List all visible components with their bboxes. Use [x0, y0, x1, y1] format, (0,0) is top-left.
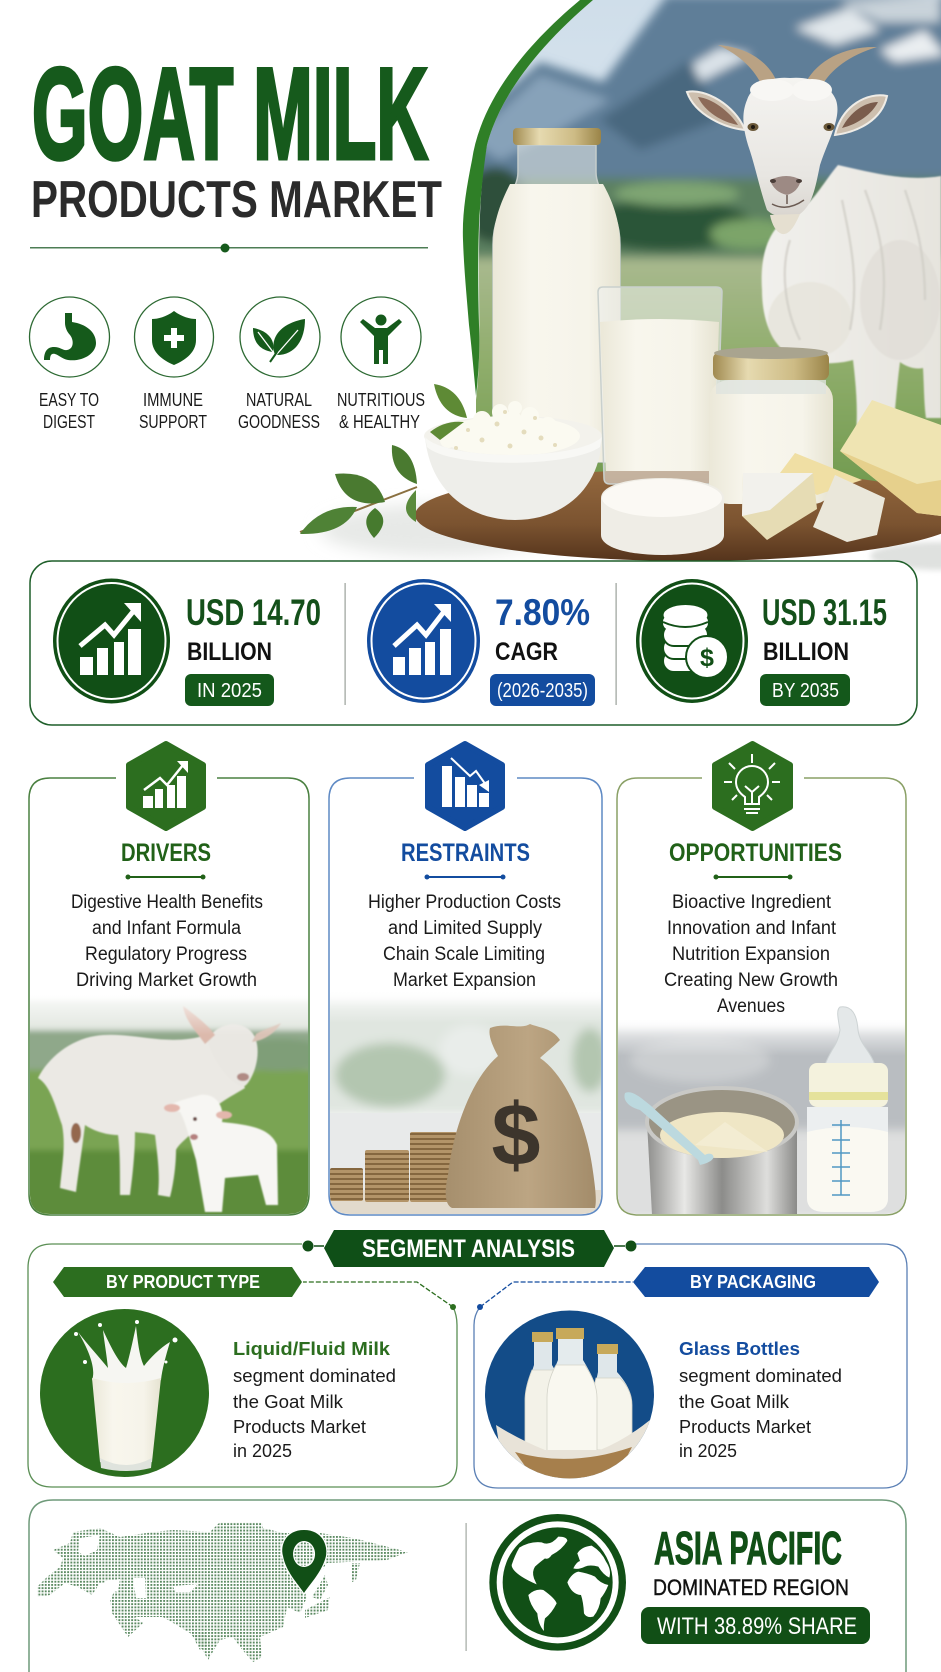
- text: glass bottles: [679, 1338, 842, 1461]
- tag: by packaging: [633, 1267, 879, 1297]
- icon: growth chart blue: [367, 579, 480, 703]
- label: natural goodness: GOODNESS: [238, 411, 320, 432]
- text: liquid fluid milk: Liquid/Fluid Milk: [233, 1338, 391, 1359]
- label: nutritious and healthy: & HEALTHY: [339, 411, 420, 432]
- text: liquid fluid milk: Products Market: [233, 1416, 366, 1437]
- stat: USD 14.70 billion in 2025: BILLION: [187, 638, 272, 666]
- restraints photo: money bag and coins: $: [492, 1085, 540, 1184]
- icon: immune support: [134, 297, 214, 377]
- heading rule: [424, 874, 506, 880]
- text: opportunities: [664, 892, 838, 1017]
- label: natural goodness: NATURAL: [246, 389, 312, 410]
- image: milk bottles in basket: [485, 1310, 654, 1480]
- text: restraints: Chain Scale Limiting: [383, 944, 545, 965]
- icon: coins: [636, 579, 748, 703]
- text: drivers: Regulatory Progress: [85, 944, 247, 965]
- text: opportunities: Avenues: [717, 996, 785, 1017]
- stat: USD 31.15 billion by 2035: USD 31.15: [762, 592, 887, 633]
- text: liquid fluid milk: [233, 1338, 396, 1461]
- pill: with 38.89% share: [641, 1607, 870, 1644]
- label: natural goodness: [238, 389, 320, 432]
- icon: globe: [489, 1514, 626, 1651]
- benefit icons row: [30, 297, 425, 432]
- image fade: [29, 985, 310, 1035]
- heading: drivers: DRIVERS: [121, 839, 211, 867]
- segment outline right: [474, 1244, 907, 1488]
- opportunities photo background: [605, 1028, 915, 1220]
- title divider: [30, 244, 428, 252]
- stat: USD 31.15 billion by 2035: BILLION: [763, 638, 849, 666]
- heading: restraints: RESTRAINTS: [401, 839, 530, 867]
- tag: by packaging: BY PACKAGING: [690, 1272, 816, 1292]
- photo background: mountains and meadow: [476, 0, 941, 482]
- tag: by product type: BY PRODUCT TYPE: [106, 1272, 260, 1292]
- stat: USD 14.70 billion in 2025: IN 2025: [197, 680, 262, 702]
- glass of milk: [598, 287, 722, 484]
- text: drivers: Digestive Health Benefits: [71, 892, 263, 913]
- heading banner: segment analysis: SEGMENT ANALYSIS: [362, 1235, 575, 1263]
- text: opportunities: Innovation and Infant: [667, 918, 837, 939]
- text: glass bottles: Glass Bottles: [679, 1338, 800, 1359]
- map: dotted Eurasia: [37, 1522, 408, 1662]
- stat: 7.80% CAGR 2026-2035: (2026-2035): [497, 680, 588, 702]
- bowl of curds: [424, 401, 602, 520]
- restraints photo: money bag and coins: [320, 1000, 610, 1215]
- wooden board: [415, 469, 941, 561]
- heading: opportunities: OPPORTUNITIES: [669, 839, 842, 867]
- stat: USD 31.15 billion by 2035: BY 2035: [772, 680, 839, 702]
- panel: regional dominance: [29, 1500, 906, 1672]
- green leaves: [300, 384, 467, 538]
- text: glass bottles: in 2025: [679, 1440, 737, 1461]
- label: nutritious and healthy: NUTRITIOUS: [337, 389, 425, 410]
- label: nutritious and healthy: [337, 389, 425, 432]
- text: glass bottles: the Goat Milk: [679, 1391, 790, 1412]
- stat: USD 31.15 billion by 2035: [760, 592, 887, 706]
- icon: natural goodness: [240, 297, 320, 377]
- stat: USD 14.70 billion in 2025: [185, 592, 321, 706]
- image fade: [617, 1016, 907, 1056]
- image: milk glass splash: [40, 1309, 209, 1477]
- opportunities photo: infant formula and bottle: [624, 1007, 888, 1215]
- label: easy to digest: [39, 389, 99, 432]
- panel: opportunities: [605, 744, 915, 1220]
- text: glass bottles: segment dominated: [679, 1365, 842, 1386]
- text: restraints: and Limited Supply: [388, 918, 542, 939]
- image fade: [329, 985, 603, 1023]
- curved green band: [463, 0, 593, 396]
- icon: coins: $: [700, 644, 714, 672]
- formula tin: [624, 1088, 797, 1215]
- hero photo: goat and dairy products: [300, 0, 941, 570]
- drivers photo: goat and kid: [30, 1002, 308, 1214]
- panel: segment analysis: [28, 1230, 907, 1488]
- panel: market statistics: [30, 561, 917, 725]
- baby bottle: [807, 1007, 888, 1212]
- subheading: dominated region: DOMINATED REGION: [653, 1575, 849, 1600]
- stat: 7.80% CAGR 2026-2035: 7.80%: [495, 592, 590, 633]
- text: liquid fluid milk: segment dominated: [233, 1365, 396, 1386]
- text: liquid fluid milk: the Goat Milk: [233, 1391, 344, 1412]
- text: opportunities: Creating New Growth: [664, 970, 838, 991]
- panel: drivers: [20, 744, 330, 1220]
- icon: nutritious and healthy: [341, 297, 421, 377]
- text: restraints: Higher Production Costs: [368, 892, 561, 913]
- heading rule: [126, 874, 206, 880]
- subtitle: Products Market: PRODUCTS MARKET: [31, 171, 442, 229]
- cheeses: [601, 400, 941, 555]
- text: restraints: [368, 892, 561, 991]
- text: restraints: Market Expansion: [393, 970, 536, 991]
- segment outline left: [28, 1244, 457, 1487]
- icon: location pin: [282, 1530, 326, 1593]
- jar: [709, 347, 833, 504]
- label: immune support: SUPPORT: [139, 411, 207, 432]
- label: immune support: IMMUNE: [143, 389, 203, 410]
- icon: easy to digest: [30, 297, 110, 377]
- text: opportunities: Nutrition Expansion: [672, 944, 830, 965]
- icon: opportunities hexagon: [715, 744, 790, 828]
- card outline opportunities: [617, 778, 906, 1215]
- label: easy to digest: EASY TO: [39, 389, 99, 410]
- label: easy to digest: DIGEST: [43, 411, 95, 432]
- panel: restraints: [320, 744, 610, 1215]
- stat: 7.80% CAGR 2026-2035: [490, 592, 595, 706]
- text: drivers: and Infant Formula: [92, 918, 241, 939]
- goat: [687, 45, 941, 433]
- text: liquid fluid milk: in 2025: [233, 1440, 292, 1461]
- label: immune support: [139, 389, 207, 432]
- icon: growth chart green: [53, 578, 170, 704]
- pill: with 38.89% share: WITH 38.89% SHARE: [657, 1613, 857, 1640]
- icon: drivers hexagon: [129, 744, 203, 828]
- card outline restraints: [329, 778, 602, 1215]
- card outline drivers: [29, 778, 309, 1215]
- title: Goat Milk: GOAT MILK: [32, 40, 428, 186]
- heading rule: [714, 874, 792, 880]
- tag: by product type: [53, 1267, 302, 1297]
- milk bottle: [493, 128, 620, 462]
- icon: restraints hexagon: [428, 744, 502, 828]
- text: glass bottles: Products Market: [679, 1416, 811, 1437]
- heading banner: segment analysis: [302, 1230, 636, 1267]
- stat: USD 14.70 billion in 2025: USD 14.70: [186, 592, 321, 633]
- text: drivers: [71, 892, 263, 991]
- stat: 7.80% CAGR 2026-2035: CAGR: [495, 638, 558, 666]
- text: opportunities: Bioactive Ingredient: [672, 892, 832, 913]
- text: drivers: Driving Market Growth: [76, 970, 257, 991]
